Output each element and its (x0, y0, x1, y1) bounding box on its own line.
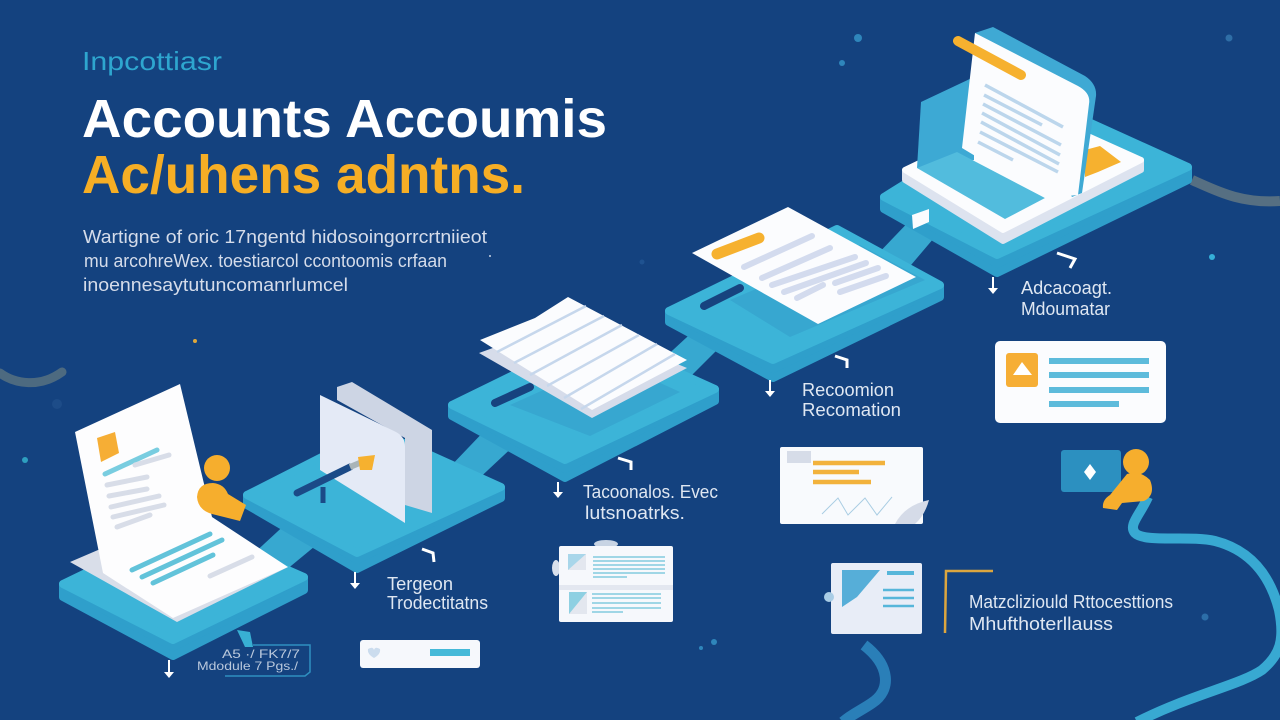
folder back sheet (337, 382, 432, 513)
paper lines (744, 236, 886, 298)
gold square (97, 432, 119, 462)
intro paragraph: mu arcohreWex. toestiarcol ccontoomis crfaan (84, 251, 447, 271)
pen (297, 455, 375, 503)
panel: platform 1 with document (63, 384, 304, 656)
gold flag (1085, 146, 1121, 177)
platform 4 slab (669, 229, 940, 378)
page lines (978, 85, 1063, 172)
white page (962, 33, 1089, 198)
curve: right blue line (1133, 497, 1280, 720)
navy slot (495, 387, 530, 403)
platform 3 slab (452, 335, 715, 478)
page lines (105, 450, 252, 583)
intro paragraph (83, 227, 487, 295)
icon: gold person (197, 455, 246, 521)
label: step 5: Mdoumatar (1021, 299, 1110, 319)
gold pill (717, 238, 759, 254)
panel: blue button (1061, 450, 1121, 492)
platform 2 slab (247, 430, 501, 569)
intro paragraph: inoennesaytutuncomanrlumcel (83, 275, 348, 295)
curve: upper left squiggle (0, 372, 62, 383)
folder front sheet (320, 395, 405, 523)
platform 1 slab (63, 525, 304, 656)
label: multifactor: Matzcliziould Rttocesttions (969, 592, 1173, 612)
book page (480, 297, 687, 410)
intro paragraph: Wartigne of oric 17ngentd hidosoingorrcrtniieot (83, 227, 487, 247)
card: multifactor (824, 563, 922, 634)
book lines (497, 306, 675, 409)
label: step 3: lutsnoatrks. (585, 503, 685, 523)
curve: right grey squiggle (1192, 180, 1280, 201)
label: step 4: Recomation (802, 400, 901, 420)
gold bracket (945, 571, 993, 633)
panel: platform 5 with document (884, 27, 1188, 273)
label: multifactor (969, 592, 1173, 634)
small pointers (422, 253, 1075, 562)
label: step 1: Mdodule 7 Pgs./ (197, 659, 299, 673)
label: step 2: Tergeon (387, 574, 453, 594)
white tray (905, 110, 1141, 241)
connector: step 4 to 5 (872, 212, 945, 278)
label: step 2: Trodectitatns (387, 593, 488, 613)
title line 1: Accounts Accoumis (82, 89, 607, 149)
inner shade (730, 245, 925, 337)
arrows pointing down (164, 277, 998, 678)
curve: lower blue line (843, 645, 885, 720)
navy slot (704, 288, 740, 306)
white tag (912, 209, 929, 229)
gold bar (958, 41, 1021, 75)
folder back panel (917, 77, 974, 168)
title line 2: Ac/uhens adntns. (82, 145, 525, 205)
card: step 4 chart (780, 447, 929, 524)
card: alert list (995, 341, 1166, 423)
grey base sheet (70, 550, 288, 622)
label: step 5: Adcacoagt. (1021, 278, 1112, 298)
white page (75, 384, 288, 618)
label: step 1 (197, 630, 310, 676)
title eyebrow: Inpcottiasr (82, 46, 222, 76)
white paper (692, 207, 916, 324)
label: step 3 (583, 482, 718, 523)
panel: platform 3 with open book (452, 297, 715, 478)
card: step 3 list (552, 540, 673, 622)
label: step 1: A5 ·/ FK7/7 (222, 647, 300, 661)
connector: step 2 to 3 (447, 425, 520, 485)
folder floor (917, 152, 1045, 219)
label: step 4: Recoomion (802, 380, 894, 400)
label: step 4 (802, 380, 901, 420)
teal backing sheet (975, 27, 1096, 197)
card: step 2 pill (360, 640, 480, 668)
panel: platform 4 with document (669, 207, 940, 378)
panel: platform 2 with folder and pen (247, 382, 501, 569)
label: step 3: Tacoonalos. Evec (583, 482, 718, 502)
platform 5 slab (884, 100, 1188, 273)
label: step 5 (1021, 278, 1112, 319)
icon: gold person with button (1103, 449, 1152, 510)
connector: step 3 to 4 (660, 325, 735, 382)
inner shade (510, 360, 680, 436)
connector: step 1 to 2 (250, 520, 320, 575)
label: multifactor: Mhufthoterllauss (969, 614, 1113, 634)
book under-sheet (479, 320, 687, 418)
label: step 2 (387, 574, 488, 613)
